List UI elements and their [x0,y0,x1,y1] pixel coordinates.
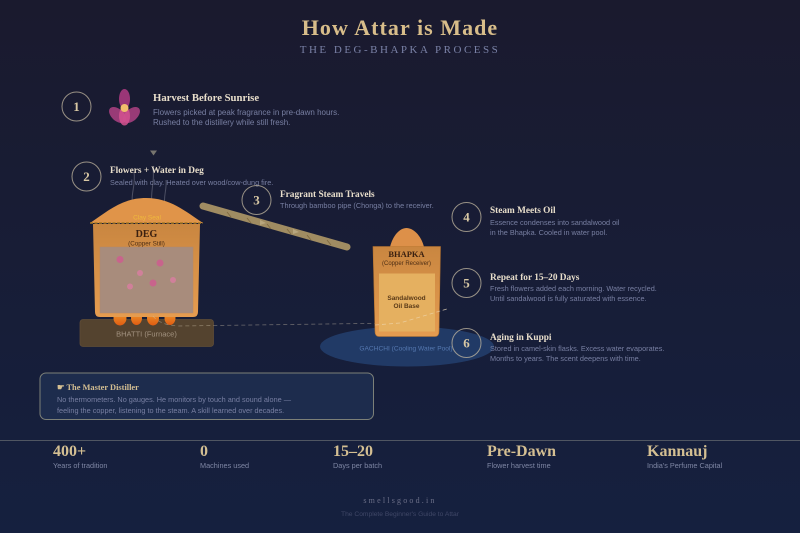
stat: origin [647,443,723,470]
step 6 heading: Aging in Kuppi [490,333,552,343]
bhapka label: BHAPKA [388,249,426,259]
step 6 badge [452,328,481,358]
rose petals [116,256,176,290]
footer note: The Complete Beginner's Guide to Attar [341,511,460,518]
deg copper still [90,198,203,317]
stat: machines: 0 [200,443,208,460]
step 4 description [490,218,620,237]
stat: harvest: Flower harvest time [487,461,551,470]
step 2 heading: Flowers + Water in Deg [110,166,204,176]
step 3 description: Through bamboo pipe (Chonga) to the receiver. [280,201,434,210]
stat: origin: Kannauj [647,443,707,460]
callout text [57,395,292,415]
bhapka receiver: Sandalwood [387,295,426,302]
stat: years: 400+ [53,443,86,460]
bhapka receiver: Oil Base [393,303,420,310]
stat: years [53,443,108,470]
step 5 badge: 5 [463,276,470,290]
gachchi cooling pool: GACHCHI (Cooling Water Pool) [359,346,453,352]
stat: days: Days per batch [333,461,382,470]
step 3 heading: Fragrant Steam Travels [280,190,375,200]
stat: days: 15–20 [333,443,373,460]
stats divider [0,440,800,442]
step 4 heading: Steam Meets Oil [490,206,556,216]
bhapka receiver [373,228,440,336]
step 1 description: Flowers picked at peak fragrance in pre-dawn hours. [153,108,339,117]
callout text: feeling the copper, listening to the steam. A skill learned over decades. [57,406,284,415]
stat: harvest: Pre-Dawn [487,443,556,460]
dashed return over bhapka [375,309,447,325]
sandalwood oil [379,274,435,332]
clay seal label: Clay Seal [133,214,161,222]
step 3 badge [242,186,271,214]
step 1 description: Rushed to the distillery while still fresh. [153,118,290,127]
step 5 description: Until sandalwood is fully saturated with essence. [490,294,647,303]
step 1 badge [62,92,91,121]
step 4 badge [452,202,481,232]
step 2 description: Sealed with clay. Heated over wood/cow-dung fire. [110,178,273,187]
stat: origin: India's Perfume Capital [647,461,723,470]
stat: years: Years of tradition [53,461,108,470]
step 2 badge: 2 [83,169,90,184]
chonga pipe [203,206,347,247]
step 4 badge: 4 [463,210,470,224]
step 5 badge [452,268,481,298]
callout text: No thermometers. No gauges. He monitors by touch and sound alone — [57,395,292,404]
step 6 description: Months to years. The scent deepens with time. [490,354,641,363]
stat: machines: Machines used [200,461,249,470]
stat: machines [200,443,249,470]
step 5 description: Fresh flowers added each morning. Water recycled. [490,284,657,293]
subtitle: THE DEG-BHAPKA PROCESS [300,44,500,56]
copper receiver label: (Copper Receiver) [382,261,431,267]
stat: days [333,443,382,470]
step 5 heading: Repeat for 15–20 Days [490,273,580,283]
gachchi cooling pool [320,326,494,366]
return dashed line [153,309,447,326]
step 5 description [490,284,657,303]
callout: master distiller [40,373,374,420]
step 3 badge: 3 [253,192,260,208]
icon: flower [106,89,143,126]
title: How Attar is Made [302,15,498,40]
footer brand: smellsgood.in [363,496,437,505]
step 4 description: in the Bhapka. Cooled in water pool. [490,228,607,237]
step 6 badge: 6 [463,336,470,350]
contents of still [100,247,193,313]
step 1 description [153,108,339,127]
step 1 badge: 1 [73,99,80,114]
bhatti furnace: BHATTI (Furnace) [116,330,177,338]
flames [114,310,176,326]
step 4 description: Essence condenses into sandalwood oil [490,218,620,227]
callout heading: ☛ The Master Distiller [57,383,139,392]
step 6 description [490,344,664,363]
step 2 badge [72,162,101,191]
step 6 description: Stored in camel-skin flasks. Excess water evaporates. [490,344,664,353]
step 1 heading: Harvest Before Sunrise [153,92,259,104]
stat: harvest [487,443,556,470]
bhatti furnace [80,320,214,346]
steam wisps [132,168,166,206]
arrow: step 1 to 2 [150,150,157,156]
copper still label: (Copper Still) [128,240,165,248]
deg label: DEG [136,229,158,240]
